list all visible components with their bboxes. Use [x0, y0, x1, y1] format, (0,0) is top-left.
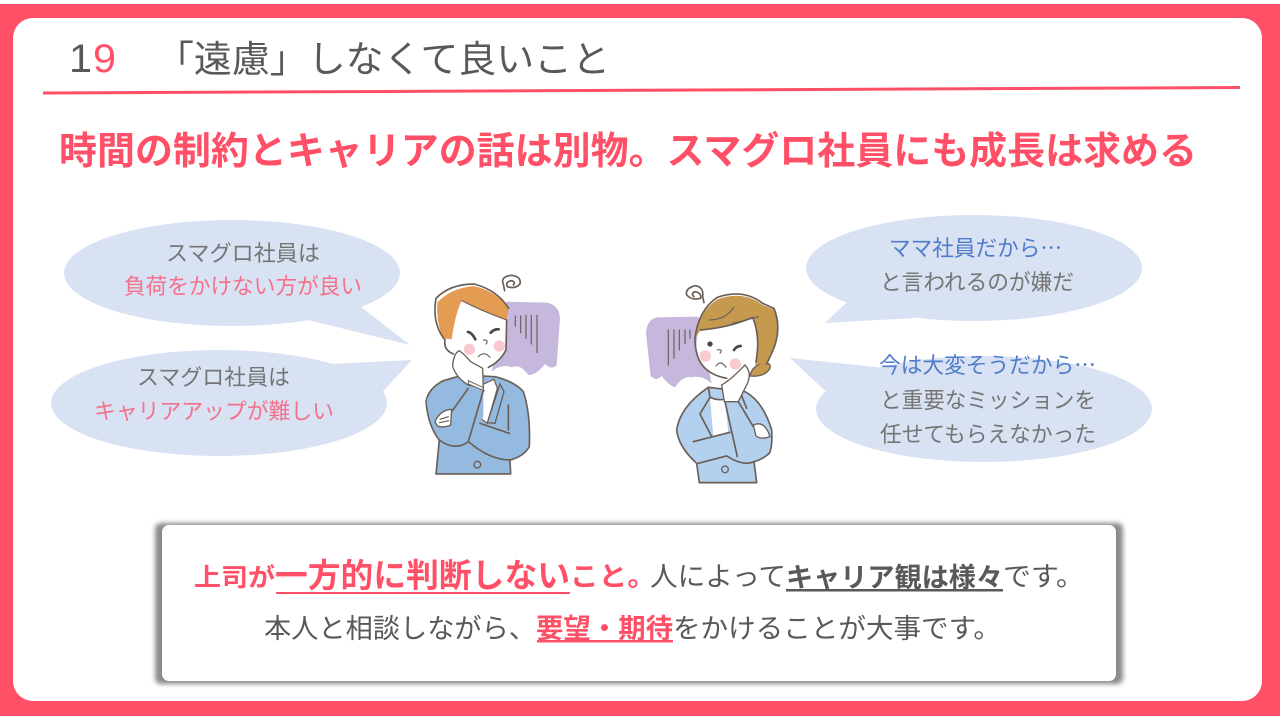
callout line 2: 本人と相談しながら、	[264, 614, 536, 644]
sleeve hand	[435, 409, 452, 427]
eyes and mouth	[468, 332, 475, 339]
icon: worried woman	[646, 286, 778, 483]
hand on cheek	[722, 365, 749, 402]
callout line 1: こと。	[570, 562, 656, 592]
head outline	[435, 284, 509, 367]
speech bubble: right top: ママ社員だから…	[889, 231, 1062, 263]
speech bubble: left top: 負荷をかけない方が良い	[124, 274, 362, 299]
sleeve hand	[753, 424, 770, 438]
callout panel	[162, 525, 1116, 681]
face	[696, 313, 758, 378]
callout line 1: 一方的に判断しない	[275, 557, 570, 594]
bun	[750, 363, 770, 376]
callout shadow	[155, 523, 1123, 684]
callout line 2: をかけることが大事です。	[673, 614, 1001, 644]
speech bubble: left bottom: キャリアアップが難しい	[94, 399, 334, 424]
callout line 1	[194, 557, 1084, 594]
thought swirl	[503, 275, 520, 291]
suit	[426, 375, 530, 474]
cheeks	[700, 350, 711, 362]
callout line 2	[264, 614, 1001, 644]
speech bubble: right bottom: 今は大変そうだから…	[879, 348, 1096, 380]
thought swirl	[686, 286, 704, 303]
speech bubble: left bottom	[51, 350, 412, 456]
suit	[677, 387, 772, 483]
title: 1	[69, 37, 92, 81]
speech bubble: right bottom	[790, 348, 1152, 462]
gloom cloud	[492, 302, 560, 375]
cheeks	[464, 344, 475, 355]
callout line 1: 人によって	[650, 562, 786, 592]
heading: 時間の制約とキャリアの話は別物。スマグロ社員にも成長は求める	[59, 131, 1197, 173]
callout line 2: 要望・期待	[536, 614, 673, 644]
callout line 1: 上司が	[194, 563, 275, 592]
hair	[437, 286, 509, 339]
speech bubble: left top	[64, 220, 410, 345]
title: 9	[93, 37, 116, 81]
speech bubble: right top	[806, 215, 1142, 323]
gloom cloud	[646, 317, 712, 387]
eyes and mouth	[707, 341, 713, 347]
speech bubble: left bottom: スマグロ社員は	[137, 365, 290, 390]
icon: worried man	[426, 275, 560, 474]
title: 「遠慮」しなくて良いこと	[156, 39, 610, 80]
arm lines	[439, 388, 510, 460]
speech bubble: left top: スマグロ社員は	[166, 241, 320, 266]
speech bubble: right bottom: と重要なミッションを	[880, 388, 1096, 413]
hand on cheek	[453, 351, 483, 388]
speech bubble: right bottom: 任せてもらえなかった	[880, 422, 1096, 447]
callout box	[155, 523, 1123, 684]
title rule	[43, 88, 1240, 93]
hair	[695, 296, 777, 365]
callout line 1: です。	[1003, 562, 1084, 592]
head outline	[695, 294, 778, 378]
callout line 1: キャリア観は様々	[786, 563, 1003, 593]
face	[445, 300, 507, 367]
speech bubble: right top: と言われるのが嫌だ	[880, 270, 1074, 295]
blouse	[710, 397, 728, 436]
